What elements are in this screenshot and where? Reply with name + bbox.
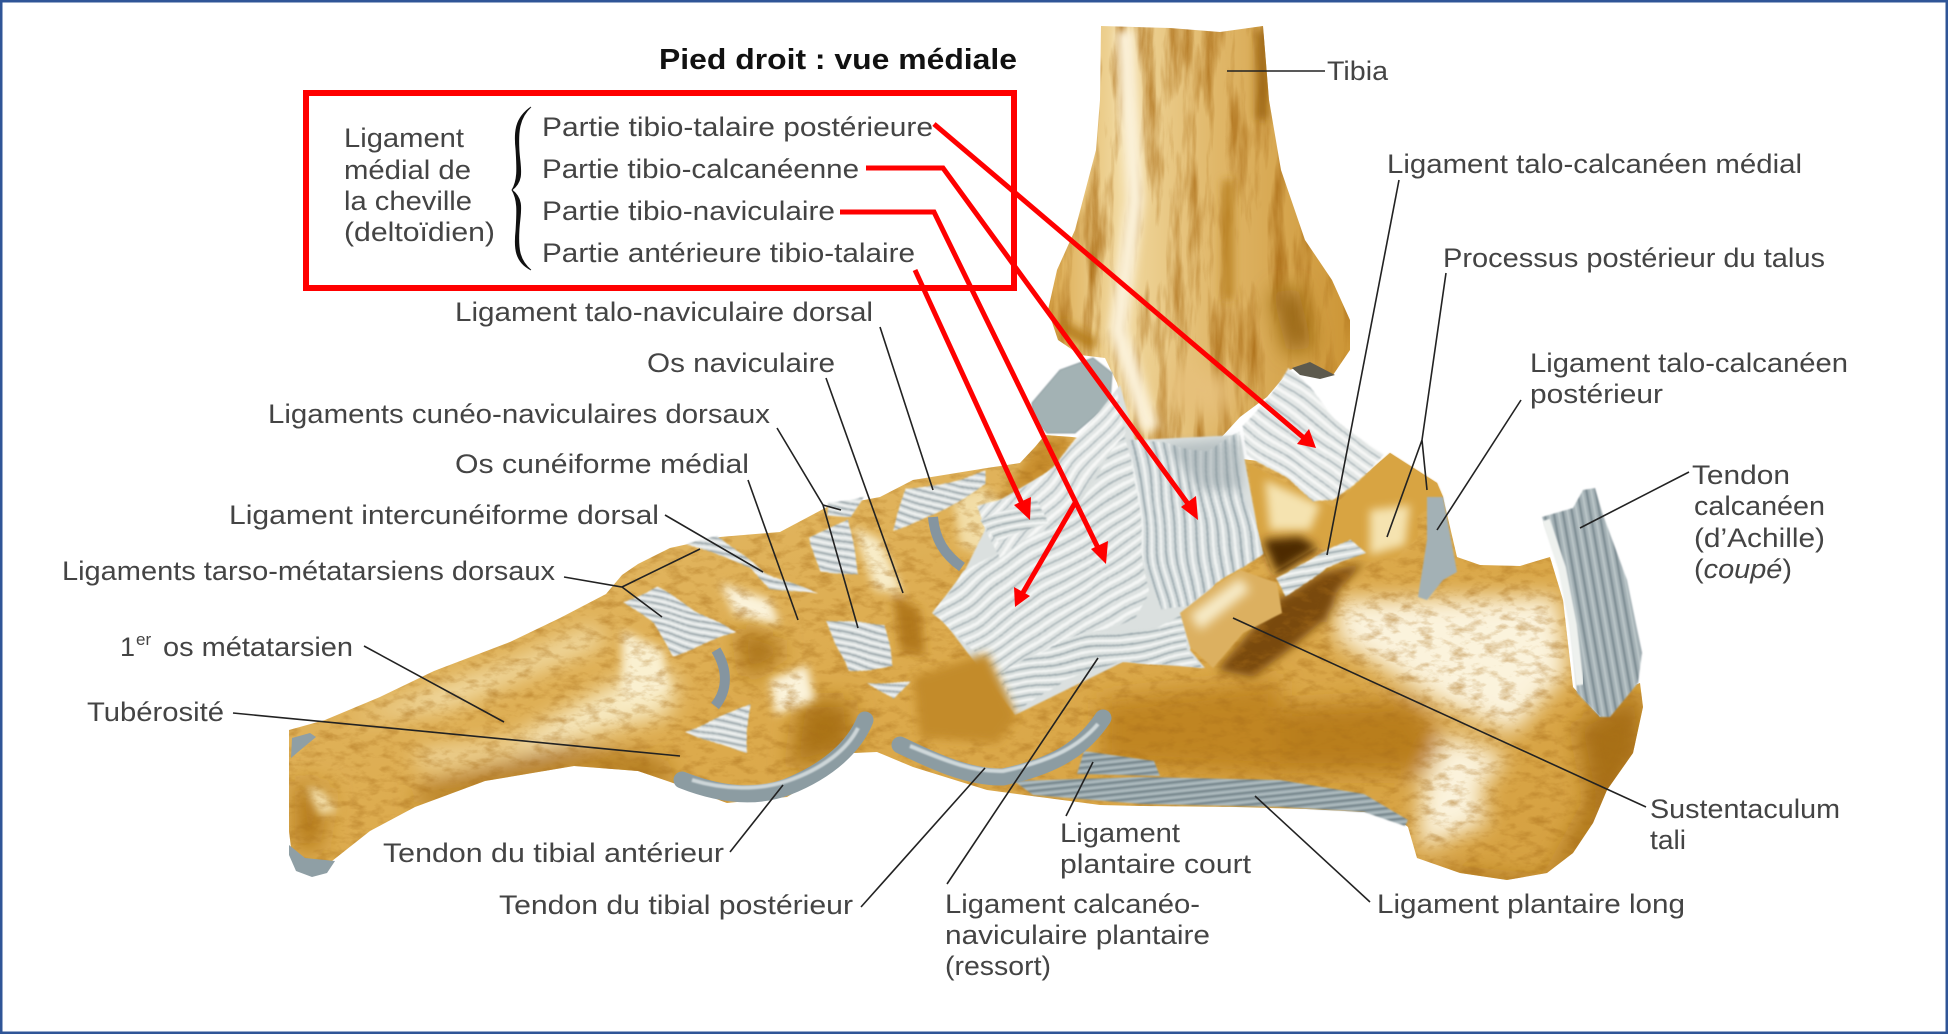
label: Ligament intercunéiforme dorsal: Ligament intercunéiforme dorsal: [229, 500, 659, 530]
ligament: top patch: [827, 498, 867, 520]
label: 1er os métatarsien: os métatarsien: [163, 632, 353, 662]
illustration: bones of the right foot: [280, 20, 1660, 890]
bone: talus body: [1247, 453, 1443, 573]
title: Pied droit : vue médiale: [659, 44, 1017, 76]
label: Ligaments tarso-métatarsiens dorsaux: Ligaments tarso-métatarsiens dorsaux: [62, 556, 556, 586]
ligament: dorsal talonavicular: [897, 470, 983, 532]
label: Tendon calcanéen (d'Achille) (coupé): [1580, 460, 1825, 584]
label: Ligament talo-calcanéen médial: Ligament talo-calcanéen médial: [1387, 149, 1802, 179]
label: Tendon calcanéen (d'Achille) (coupé): (d’Achille): [1694, 523, 1825, 553]
label: Sustentaculum tali: tali: [1650, 825, 1686, 855]
label: Processus postérieur du talus: [1387, 243, 1825, 537]
ligaments: dorsal cuneonavicular, lower: [823, 620, 893, 670]
ligament: tibio-calcaneal part: [1130, 433, 1260, 607]
label: Ligament talo-naviculaire dorsal: [455, 297, 933, 490]
label: Os cunéiforme médial: Os cunéiforme médial: [455, 449, 749, 479]
ligament: plantar calcaneonavicular (spring): [1000, 613, 1203, 715]
label: Ligament plantaire long: Ligament plantaire long: [1377, 889, 1685, 919]
ligament: short plantar: [1077, 751, 1160, 776]
label: Ligament calcanéo-naviculaire plantaire (ressort): naviculaire plantaire: [945, 920, 1210, 950]
bone: sustentaculum tali: [1180, 570, 1282, 668]
label: Tendon du tibial postérieur: [499, 768, 985, 920]
ligament: medial talocalcaneal: [1273, 537, 1370, 597]
label: Tendon calcanéen (d'Achille) (coupé): calcanéen: [1694, 491, 1825, 521]
label: Tubérosité: [87, 697, 680, 756]
panel: medial ligament of the ankle, red box: [306, 93, 1014, 288]
text: ligament name: médial de: [344, 155, 471, 185]
label: Tendon calcanéen (d'Achille) (coupé): Tendon: [1692, 460, 1790, 490]
label: 1er os métatarsien: [120, 630, 504, 722]
text: four parts: Partie antérieure tibio-talaire: [542, 238, 915, 268]
bone: tibia: [1048, 26, 1350, 440]
text: four parts: [542, 112, 933, 268]
bone: talus dark recess: [1263, 537, 1317, 573]
label: Ligaments tarso-métatarsiens dorsaux: [62, 549, 700, 617]
red arrow: tibio-talar posterior: [934, 124, 1316, 448]
label: Os cunéiforme médial: [455, 449, 798, 620]
label: 1er os métatarsien: er: [136, 630, 151, 649]
label: Ligament talo-calcanéen postérieur: postérieur: [1530, 379, 1663, 409]
label: Os naviculaire: Os naviculaire: [647, 348, 835, 378]
tendon: pale left edge: [1546, 520, 1580, 685]
red arrow: anterior tibio-talar: [915, 270, 1031, 520]
brace: [512, 107, 531, 270]
label: Ligament talo-calcanéen postérieur: Ligament talo-calcanéen: [1530, 348, 1848, 378]
label: Sustentaculum tali: [1233, 618, 1840, 855]
text: ligament name: (deltoïdien): [344, 217, 495, 247]
label: 1er os métatarsien: 1: [120, 632, 135, 662]
label: Ligament talo-calcanéen médial: [1327, 149, 1802, 555]
tendon: tibialis anterior: [682, 720, 865, 794]
red arrow: tibio-calcaneal: [866, 168, 1198, 520]
text: ligament name: Ligament: [344, 123, 465, 153]
text: ligament name: [344, 123, 495, 247]
shadow notch under the medial malleolus: [1292, 362, 1335, 379]
label: Ligament plantaire long: [1255, 796, 1685, 919]
ligament shading: tibio-calcaneal upper grey: [1165, 438, 1242, 490]
tendon: tibialis anterior highlight: [692, 728, 858, 788]
tendon: tibialis posterior highlight: [910, 724, 1098, 771]
ligament: posterior tibio-talar part: [1243, 370, 1383, 503]
ligaments: grey fibrous bands: [623, 358, 1457, 826]
ligament: small band near navicular: [867, 680, 913, 700]
tendon: small arc on first cuneiform: [715, 650, 725, 706]
ligament: long plantar: [1014, 777, 1408, 826]
ligaments: dorsal tarsometatarsal: [623, 587, 737, 657]
label: Os naviculaire: [647, 348, 903, 593]
text: four parts: Partie tibio-talaire postérieure: [542, 112, 933, 142]
label: Ligament calcanéo-naviculaire plantaire (ressort): [945, 658, 1210, 981]
label: Sustentaculum tali: Sustentaculum: [1650, 794, 1840, 824]
label: Tendon calcanéen (d'Achille) (coupé): (coupé): [1694, 554, 1792, 584]
text: four parts: Partie tibio-naviculaire: [542, 196, 835, 226]
bone grain texture: [280, 420, 1660, 890]
label: Ligament plantaire court: [1060, 762, 1252, 879]
bone: talus highlights: [1265, 480, 1410, 555]
bone: sustentaculum highlight: [1190, 578, 1250, 630]
cartilage: talar articular surface: [1032, 358, 1112, 433]
red arrow: tibio-navicular, with branch: [840, 212, 1108, 607]
label: Tubérosité: Tubérosité: [87, 697, 224, 727]
label: Ligaments cunéo-naviculaires dorsaux: Ligaments cunéo-naviculaires dorsaux: [268, 399, 771, 429]
ligament: dorsal intercuneiform: [687, 537, 817, 593]
ligaments: dorsal cuneonavicular, upper: [810, 523, 860, 577]
label: Processus postérieur du talus: Processus postérieur du talus: [1443, 243, 1825, 273]
cartilage: first metatarsal head, bottom: [289, 845, 335, 877]
ligament: continuous grey base of the deltoid mass: [935, 385, 1262, 715]
ligament: tibio-navicular part: [930, 430, 1147, 713]
text: ligament name: la cheville: [344, 186, 472, 216]
cartilage: first metatarsal head, top: [291, 733, 316, 758]
bone: navicular tuberosity: [913, 653, 1017, 743]
text: four parts: Partie tibio-calcanéenne: [542, 154, 859, 184]
label: Tendon du tibial antérieur: [383, 785, 783, 868]
label: Ligament talo-naviculaire dorsal: Ligament talo-naviculaire dorsal: [455, 297, 873, 327]
tendon: calcaneal (Achilles), cut: [1542, 488, 1642, 717]
label: Ligament talo-calcanéen postérieur: [1437, 348, 1848, 530]
label: Tibia: Tibia: [1327, 56, 1389, 86]
label: Ligaments cunéo-naviculaires dorsaux: [268, 399, 858, 628]
tendon: tibialis posterior: [900, 718, 1103, 777]
label: Tendon du tibial antérieur: Tendon du tibial antérieur: [383, 838, 724, 868]
label: Ligament calcanéo-naviculaire plantaire (ressort): Ligament calcanéo-: [945, 889, 1200, 919]
label: Ligament intercunéiforme dorsal: [229, 500, 763, 572]
ligament: posterior talocalcaneal: [1418, 497, 1457, 600]
ligament: talar head fibres: [980, 500, 1050, 545]
ligament: anterior tibio-talar part: [975, 388, 1128, 560]
ligament: plantar tarsometatarsal patch: [687, 703, 750, 753]
tendon: small arc near navicular: [933, 517, 962, 567]
label: Ligament calcanéo-naviculaire plantaire (ressort): (ressort): [945, 951, 1051, 981]
label: Ligament plantaire court: plantaire court: [1060, 849, 1252, 879]
label: Tendon du tibial postérieur: Tendon du tibial postérieur: [499, 890, 853, 920]
red frame: [306, 93, 1014, 288]
bone: foot skeleton silhouette: [280, 420, 1660, 890]
label: Ligament plantaire court: Ligament: [1060, 818, 1181, 848]
